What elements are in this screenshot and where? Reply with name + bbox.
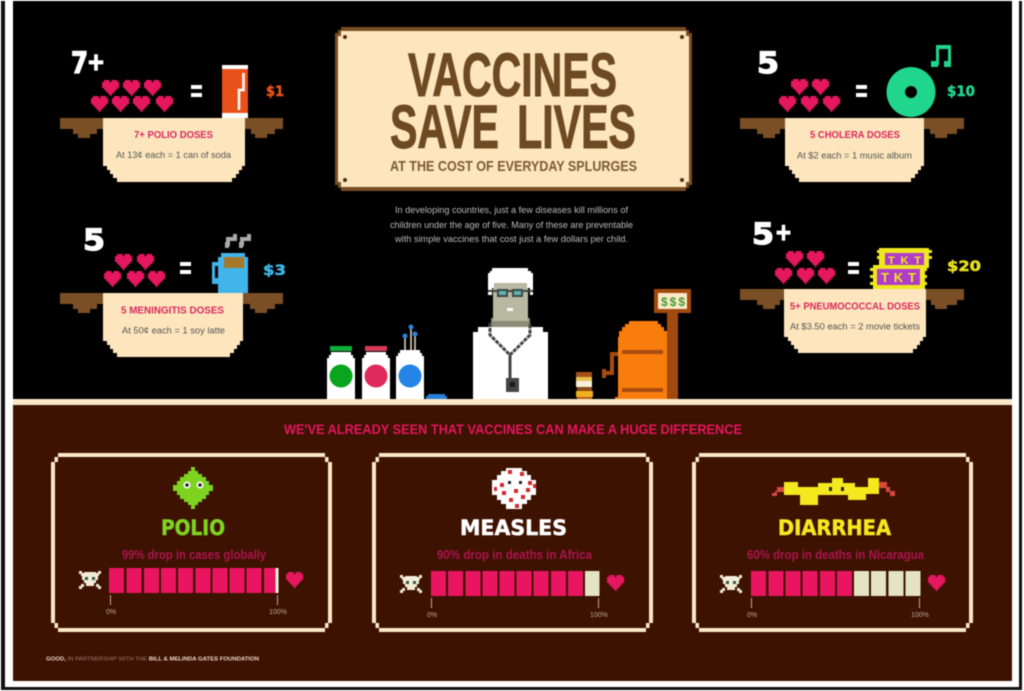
hearts [775, 251, 835, 284]
polio stat: 99% drop in cases globally [122, 548, 266, 562]
polio name: POLIO [161, 516, 225, 540]
icon: movie tickets: TKT [888, 255, 921, 267]
measles bar [431, 571, 600, 596]
intro text: In developing countries, just a few diseases kill millions of [395, 205, 628, 216]
measles axis: 0% [427, 612, 437, 619]
bowl with label: At 13¢ each = 1 can of soda [116, 150, 231, 160]
diarrhea stat: 60% drop in deaths in Nicaragua [747, 548, 925, 562]
count 5+: + [775, 220, 792, 246]
icon: skull [400, 575, 422, 593]
card: pneumococcal doses [740, 217, 981, 353]
icon: heart [607, 575, 624, 591]
count 7+: + [87, 48, 105, 76]
bowl with label: At 50¢ each = 1 soy latte [122, 326, 225, 336]
shelf [740, 118, 964, 138]
icon: skull [720, 575, 742, 593]
price $20: $20 [947, 259, 981, 275]
bowl with label: 5 CHOLERA DOSES [810, 129, 900, 141]
bowl with label: 5+ PNEUMOCOCCAL DOSES [790, 300, 920, 312]
count 5: 5 [83, 223, 105, 257]
bowl with label: At $3.50 each = 2 movie tickets [790, 322, 921, 332]
diarrhea axis: 0% [747, 612, 757, 619]
icon: diarrhea worm [772, 478, 895, 505]
bowl with label [103, 293, 243, 357]
price $3: $3 [263, 263, 286, 279]
shelf [60, 293, 283, 313]
measles stat: 90% drop in deaths in Africa [437, 548, 593, 562]
icon: skull [79, 571, 101, 589]
register body [615, 321, 667, 399]
counter band [13, 399, 1012, 405]
equals [848, 262, 859, 274]
black upper background [13, 1, 1012, 400]
intro text: children under the age of five. Many of these are preventable [390, 220, 633, 231]
shelf [60, 118, 283, 138]
diarrhea axis [747, 598, 929, 619]
diarrhea name: DIARRHEA [778, 516, 892, 540]
count 5+: 5 [752, 217, 774, 251]
register stripes [622, 350, 663, 392]
icon: steaming mug [212, 234, 249, 293]
bowl with label: 7+ POLIO DOSES [134, 129, 213, 141]
icon: green vaccine bottle [327, 346, 355, 399]
icon: measles virus [492, 468, 536, 509]
card: cholera doses [740, 45, 975, 182]
icon: polio virus [173, 467, 213, 509]
bowl with label [103, 118, 245, 182]
polio axis: 0% [106, 609, 116, 616]
panel: polio [51, 453, 332, 632]
price $10: $10 [947, 84, 975, 100]
cash register [604, 289, 691, 399]
card: meningitis doses [60, 223, 286, 357]
doctor figure [473, 268, 548, 399]
bowl with label [784, 289, 926, 353]
count 5+ [752, 217, 792, 251]
diarrhea bar [751, 571, 920, 596]
measles axis: 100% [590, 612, 608, 619]
bowl with label: At $2 each = 1 music album [797, 150, 912, 160]
panel: diarrhea [692, 453, 973, 632]
mouth [507, 308, 513, 311]
lab coat [473, 327, 548, 399]
glasses [488, 289, 533, 297]
title line 1: VACCINES [408, 41, 617, 109]
equals [191, 85, 202, 97]
polio axis [106, 595, 287, 616]
diarrhea axis: 100% [911, 612, 929, 619]
hearts [779, 79, 840, 112]
icon: stacked coins [576, 372, 593, 400]
icon: soda can [222, 65, 248, 118]
bowl with label: 5 MENINGITIS DOSES [121, 304, 224, 316]
section heading: WE'VE ALREADY SEEN THAT VACCINES CAN MAKE A HUGE DIFFERENCE [284, 422, 742, 437]
hat [488, 268, 533, 295]
hearts [91, 80, 173, 112]
polio bar [109, 568, 278, 593]
shelf [740, 289, 964, 309]
equals [856, 85, 867, 97]
icon: movie tickets: TKT [881, 270, 916, 285]
intro text [390, 205, 633, 245]
icon: blue dish [426, 394, 447, 399]
icon: music album disc [887, 67, 936, 117]
count 7+: 7 [71, 46, 88, 80]
count 5: 5 [757, 46, 779, 80]
measles name: MEASLES [460, 516, 567, 540]
bowl with label [785, 118, 924, 182]
dark brown lower background [13, 404, 1012, 681]
icon: blue bottle with swabs [396, 324, 424, 399]
title line 2: SAVE LIVES [390, 93, 636, 161]
equals [180, 262, 191, 274]
price sign: $$$ [661, 295, 685, 309]
icon: movie tickets [870, 248, 932, 289]
intro text: with simple vaccines that cost just a few dollars per child. [394, 234, 628, 245]
count 7+ [71, 46, 105, 80]
post [667, 313, 678, 399]
panel: measles [372, 453, 653, 632]
crank [604, 354, 618, 378]
polio axis: 100% [269, 609, 287, 616]
icon: music note [931, 45, 951, 67]
icon: heart [928, 575, 945, 591]
measles axis [427, 598, 608, 619]
icon: red vaccine bottle [362, 346, 390, 399]
footer credit: GOOD, IN PARTNERSHIP WITH THE BILL & MELINDA GATES FOUNDATION [46, 656, 259, 662]
price $1: $1 [266, 84, 284, 100]
head [491, 318, 530, 327]
title panel [335, 27, 692, 191]
stethoscope [490, 323, 530, 392]
hearts [104, 254, 165, 287]
card: polio doses [60, 46, 284, 182]
icon: heart [286, 572, 303, 588]
subtitle: AT THE COST OF EVERYDAY SPLURGES [390, 158, 637, 175]
